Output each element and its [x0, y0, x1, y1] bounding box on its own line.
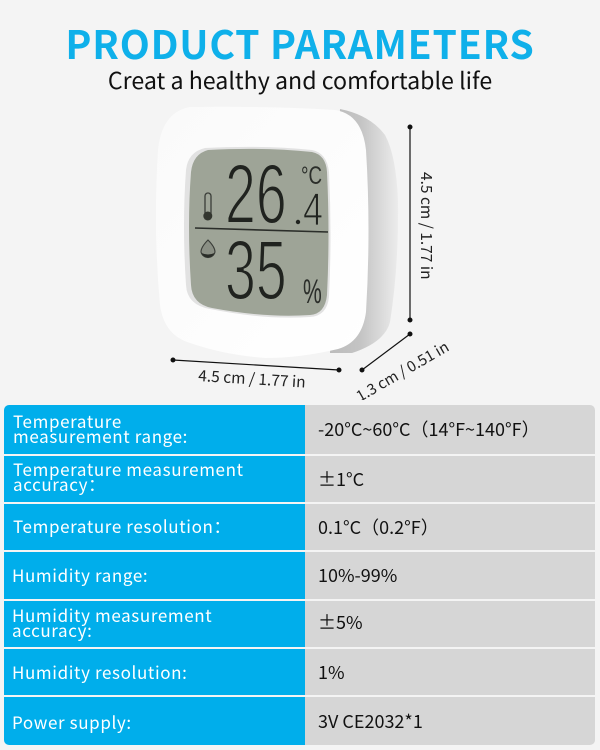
row: power supply label	[4, 697, 305, 745]
row: humidity range value: 10%-99%	[318, 562, 397, 588]
icon: water drop	[201, 240, 215, 258]
row: humidity accuracy label	[4, 601, 305, 647]
icon: thermometer	[203, 193, 212, 220]
row: humidity accuracy label: accuracy:	[12, 617, 92, 642]
row: humidity accuracy value	[305, 601, 595, 647]
row: humidity resolution label	[4, 649, 305, 695]
row: temperature range label: measurement range:	[13, 423, 188, 448]
device body	[156, 107, 398, 358]
row: temperature accuracy value	[305, 456, 595, 502]
height dimension line	[408, 125, 412, 322]
parameters table	[4, 405, 595, 745]
row: temperature accuracy label	[4, 456, 305, 502]
subtitle: Creat a healthy and comfortable life	[108, 62, 492, 96]
LCD bezel	[184, 147, 330, 318]
row: power supply label: Power supply:	[12, 709, 132, 734]
row: power supply value: 3V CE2032*1	[318, 708, 423, 734]
row: temperature range value	[305, 405, 595, 454]
row: temperature range label	[4, 405, 305, 454]
row: power supply value	[305, 697, 595, 745]
LCD screen	[189, 149, 328, 316]
depth dimension line	[360, 332, 412, 372]
product photo: thermometer with dimensions	[162, 109, 453, 400]
row: temperature range value: -20°C~60°C（14°F~140°F）	[318, 416, 540, 442]
device side	[330, 109, 398, 353]
LCD percent unit: %	[303, 272, 322, 310]
row: humidity range label	[4, 552, 305, 599]
row: humidity range value	[305, 552, 595, 599]
row: humidity range label: Humidity range:	[12, 562, 148, 587]
row: temperature accuracy label: accuracy：	[13, 471, 106, 496]
LCD temperature reading: 26	[225, 149, 287, 242]
LCD tenths reading: 4	[303, 184, 323, 235]
row: humidity accuracy value: ±5%	[318, 609, 363, 635]
row: temperature range label: Temperature	[13, 408, 122, 433]
row: humidity resolution value: 1%	[318, 659, 345, 685]
LCD humidity reading: 35	[225, 225, 287, 318]
row: humidity resolution value	[305, 649, 595, 695]
row: temperature accuracy label: Temperature measurement	[13, 456, 244, 481]
height label: 4.5 cm / 1.77 in	[416, 172, 438, 280]
row: temperature resolution label: Temperature resolution：	[13, 513, 231, 538]
device front face	[156, 107, 368, 358]
title: PRODUCT PARAMETERS	[65, 15, 535, 71]
width dimension line	[171, 358, 341, 372]
row: temperature resolution label	[4, 504, 305, 550]
row: temperature resolution value: 0.1°C（0.2°F）	[318, 514, 439, 540]
row: temperature accuracy value: ±1°C	[318, 466, 364, 492]
row: humidity resolution label: Humidity resolution:	[12, 659, 188, 684]
LCD decimal point	[296, 220, 300, 224]
row: temperature resolution value	[305, 504, 595, 550]
width label: 4.5 cm / 1.77 in	[198, 364, 306, 393]
LCD divider	[195, 228, 328, 232]
row: humidity accuracy label: Humidity measurement	[12, 602, 212, 627]
LCD celsius unit: °C	[301, 161, 322, 190]
